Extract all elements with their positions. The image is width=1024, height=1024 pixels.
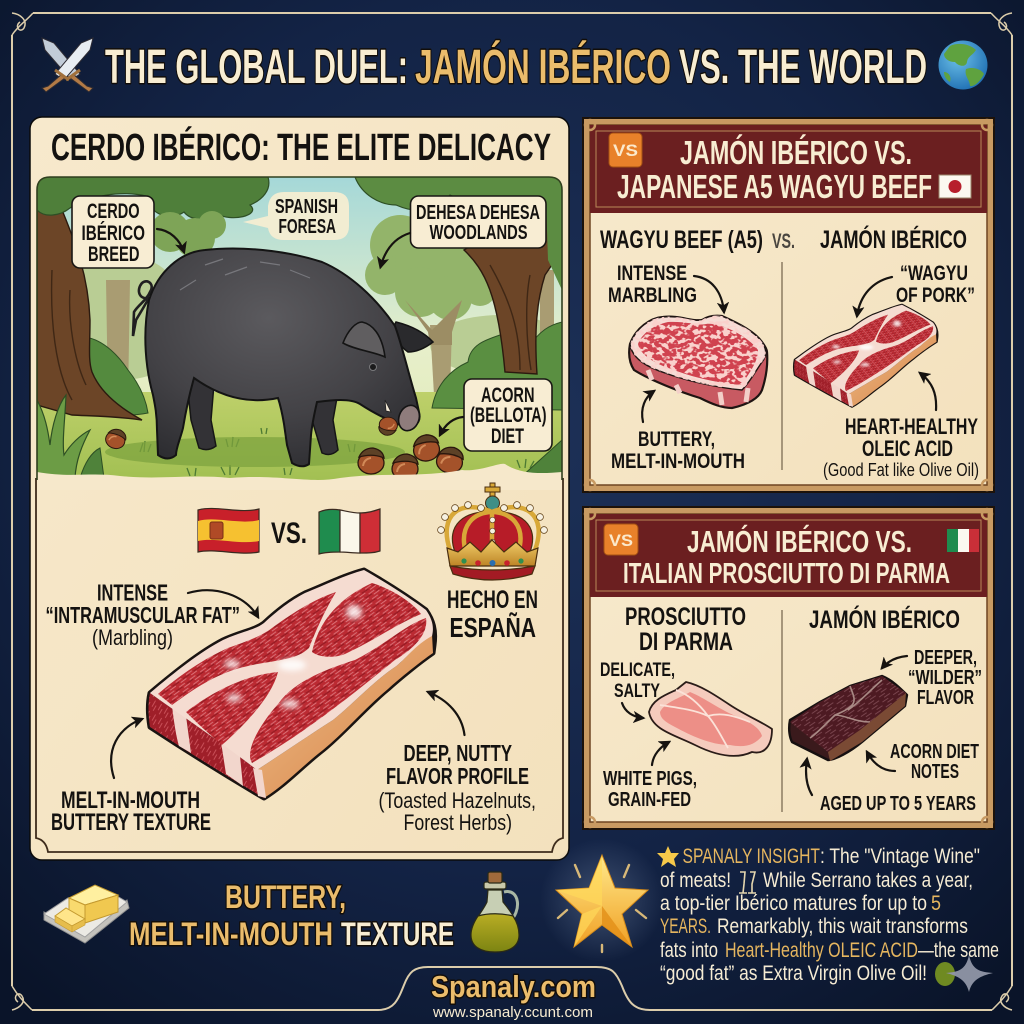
label: acorn diet: ACORN: [481, 384, 534, 407]
callout: delicate salty: DELICATE,: [600, 660, 675, 681]
column headings: PROSCIUTTO: [625, 603, 746, 631]
callout: nutty flavor: [378, 740, 536, 835]
heading: CERDO IBÉRICO: THE ELITE DELICACY: [51, 125, 551, 169]
arrow: to jamón base: [920, 373, 936, 410]
callout: intramuscular fat: “INTRAMUSCULAR FAT”: [46, 602, 240, 628]
arrow: to acorns: [440, 417, 463, 435]
header band: JAMÓN IBÉRICO VS.: [687, 523, 912, 559]
column headings: WAGYU BEEF (A5): [600, 226, 763, 254]
callout: intense marbling: [608, 262, 697, 307]
callout: buttery: MELT-IN-MOUTH: [611, 450, 745, 473]
foreground plants: [37, 395, 562, 478]
label: Dehesa woodlands: WOODLANDS: [430, 222, 528, 244]
label: Spanish foresa: [243, 192, 349, 240]
icon: dark jamón slice: [789, 676, 907, 761]
arrow: to wagyu base: [642, 391, 654, 422]
footer brand: www.spanaly.ccunt.com: [432, 1004, 593, 1021]
callout: wagyu of pork: [896, 262, 975, 307]
icon: Spanish flag: [198, 508, 259, 553]
text: VS.: VS.: [271, 517, 307, 550]
text block: Spanaly insight: 5: [931, 892, 941, 915]
callout: intramuscular fat: [46, 580, 240, 650]
callout: wagyu of pork: OF PORK”: [896, 284, 975, 307]
title text: THE GLOBAL DUEL:: [105, 41, 408, 94]
forest scene: [37, 177, 570, 490]
label: Cerdo Ibérico breed: CERDO: [87, 200, 140, 223]
text: buttery texture: [129, 879, 454, 952]
text: buttery texture: MELT-IN-MOUTH: [129, 916, 333, 952]
label: Dehesa woodlands: DEHESA DEHESA: [416, 202, 540, 224]
pig shadow: [105, 437, 405, 467]
callout: deeper flavor: DEEPER,: [914, 647, 977, 669]
arrow: to dark jamón top: [882, 656, 907, 668]
callout: deeper flavor: “WILDER”: [908, 667, 982, 689]
callout: nutty flavor: (Toasted Hazelnuts,: [378, 788, 536, 813]
icon: butter: [44, 885, 129, 943]
label: acorn diet: DIET: [491, 425, 524, 448]
icon: crossed swords: [42, 38, 93, 92]
callout: oleic acid: [823, 414, 979, 480]
callout: acorn diet notes: [890, 741, 979, 783]
icon: Italy flag: [947, 529, 979, 552]
corner flourishes: [585, 120, 992, 490]
VS badge: VS: [609, 531, 633, 550]
text block: Spanaly insight: a top-tier Ibérico matures for up to: [660, 892, 927, 915]
label: Dehesa woodlands: [410, 196, 546, 248]
column headings: DI PARMA: [639, 628, 733, 656]
text block: Spanaly insight: [657, 845, 999, 992]
callout: oleic acid: OLEIC ACID: [862, 436, 953, 461]
text block: Spanaly insight: Heart-Healthy OLEIC ACID: [725, 939, 918, 962]
label: Cerdo Ibérico breed: IBÉRICO: [82, 222, 145, 245]
callout: delicate salty: SALTY: [614, 681, 660, 702]
acorns: [103, 416, 465, 480]
icon: royal crown: [438, 483, 547, 580]
text block: Spanaly insight: While Serrano takes a year,: [763, 869, 973, 892]
callout: delicate salty: [600, 660, 675, 702]
grass fade: [37, 464, 562, 490]
arrow: to wagyu marbling: [694, 276, 724, 312]
text block: Spanaly insight: “good fat” as Extra Virgin Olive Oil!: [660, 962, 927, 985]
arrow: to jamón top: [857, 277, 892, 316]
icon: globe: [938, 40, 988, 90]
arrow: to pig: [157, 229, 184, 252]
icon: jamón ibérico slice: [148, 570, 435, 798]
icon: wagyu steak: [625, 310, 770, 408]
grass details: [140, 428, 534, 476]
footer brand: [431, 969, 596, 1021]
panel: vs Prosciutto: [583, 507, 994, 829]
callout: wagyu of pork: “WAGYU: [900, 262, 968, 285]
callout: buttery: BUTTERY,: [638, 428, 715, 451]
label: Spanish foresa: SPANISH: [275, 196, 338, 218]
header band: [590, 514, 987, 597]
arrow: to texture: [111, 719, 142, 778]
icon: jamón slice small: [794, 305, 937, 407]
text: buttery texture: BUTTERY,: [225, 879, 346, 915]
icon: olive: [935, 962, 955, 986]
text block: Spanaly insight: Remarkably, this wait transforms: [717, 915, 968, 938]
text: buttery texture: TEXTURE: [341, 916, 454, 952]
callout: intramuscular fat: (Marbling): [92, 625, 173, 650]
bushes: [37, 322, 562, 415]
icon: Italian flag: [319, 509, 380, 554]
callout: deeper flavor: FLAVOR: [917, 687, 974, 709]
panel: Cerdo Ibérico: [30, 117, 570, 860]
text block: Spanaly insight: of meats!: [660, 869, 731, 892]
callout: white pigs: [603, 768, 697, 811]
text block: Spanaly insight: fats into: [660, 939, 718, 962]
label: Cerdo Ibérico breed: BREED: [88, 243, 140, 266]
icon: olive oil bottle: [471, 872, 519, 952]
callout: acorn diet notes: ACORN DIET: [890, 741, 979, 763]
label: Cerdo Ibérico breed: [72, 196, 154, 268]
arrow: to woodlands: [380, 233, 410, 267]
text block: Spanaly insight: YEARS.: [660, 915, 711, 938]
callout: white pigs: GRAIN-FED: [608, 789, 691, 811]
icon: champagne glasses: [739, 872, 756, 893]
label: Spanish foresa: FORESA: [278, 216, 336, 238]
arrow: to dark jamón right: [867, 752, 895, 771]
callout: nutty flavor: Forest Herbs): [404, 810, 512, 835]
tree trunks: [38, 211, 552, 421]
callout: oleic acid: HEART-HEALTHY: [845, 414, 978, 439]
callout: intense marbling: INTENSE: [617, 262, 687, 285]
callout: deeper flavor: [908, 647, 982, 709]
text block: Spanaly insight: —the same: [918, 939, 999, 962]
VS badge: [609, 133, 642, 167]
corner flourishes: [585, 509, 992, 827]
icon: prosciutto slice: [649, 682, 772, 756]
callout: melt-in-mouth: [51, 787, 211, 836]
text: Hecho en España: HECHO EN: [447, 586, 538, 614]
callout: buttery: [611, 428, 745, 473]
VS badge: VS: [613, 141, 638, 160]
callout: oleic acid: (Good Fat like Olive Oil): [823, 460, 979, 480]
title: [42, 38, 988, 94]
icon: Iberian pig: [133, 248, 433, 466]
icon: small star: [657, 846, 679, 867]
tree canopies: [37, 177, 562, 290]
column headings: JAMÓN IBÉRICO: [809, 604, 960, 634]
text block: Spanaly insight: SPANALY INSIGHT: [682, 845, 820, 868]
header band: JAMÓN IBÉRICO VS.: [680, 134, 912, 171]
callout: melt-in-mouth: MELT-IN-MOUTH: [61, 787, 200, 814]
arrow: to prosciutto: [622, 703, 643, 718]
icon: star: [540, 838, 664, 962]
column headings: VS.: [772, 230, 795, 253]
arrow: to dark jamón left: [806, 759, 812, 795]
icon: Japan flag: [939, 175, 971, 198]
text: Hecho en España: ESPAÑA: [450, 612, 536, 643]
title: JAMÓN IBÉRICO: [415, 39, 671, 94]
column headings: [600, 224, 967, 254]
arrow: to flavor: [428, 692, 464, 735]
icon: sparkle: [946, 955, 993, 992]
callout: intramuscular fat: INTENSE: [97, 580, 168, 606]
label: acorn diet: (BELLOTA): [470, 404, 546, 427]
callout: white pigs: WHITE PIGS,: [603, 768, 697, 790]
label: acorn diet: [464, 379, 552, 451]
panel: vs Wagyu: [583, 118, 994, 492]
callout: nutty flavor: FLAVOR PROFILE: [386, 763, 529, 789]
footer brand: Spanaly.com: [431, 969, 596, 1004]
header band: [590, 125, 987, 213]
VS badge: [604, 524, 638, 555]
callout: nutty flavor: DEEP, NUTTY: [404, 740, 512, 766]
arrow: to prosciutto base: [652, 742, 669, 765]
arrow: to marbling: [188, 590, 258, 617]
callout: melt-in-mouth: BUTTERY TEXTURE: [51, 809, 211, 836]
callout: intense marbling: MARBLING: [608, 284, 697, 307]
column headings: [625, 603, 960, 656]
column headings: JAMÓN IBÉRICO: [820, 224, 967, 254]
text: Hecho en España: [447, 586, 538, 643]
callout: acorn diet notes: NOTES: [911, 761, 959, 783]
text block: Spanaly insight: : The "Vintage Wine": [820, 845, 980, 868]
